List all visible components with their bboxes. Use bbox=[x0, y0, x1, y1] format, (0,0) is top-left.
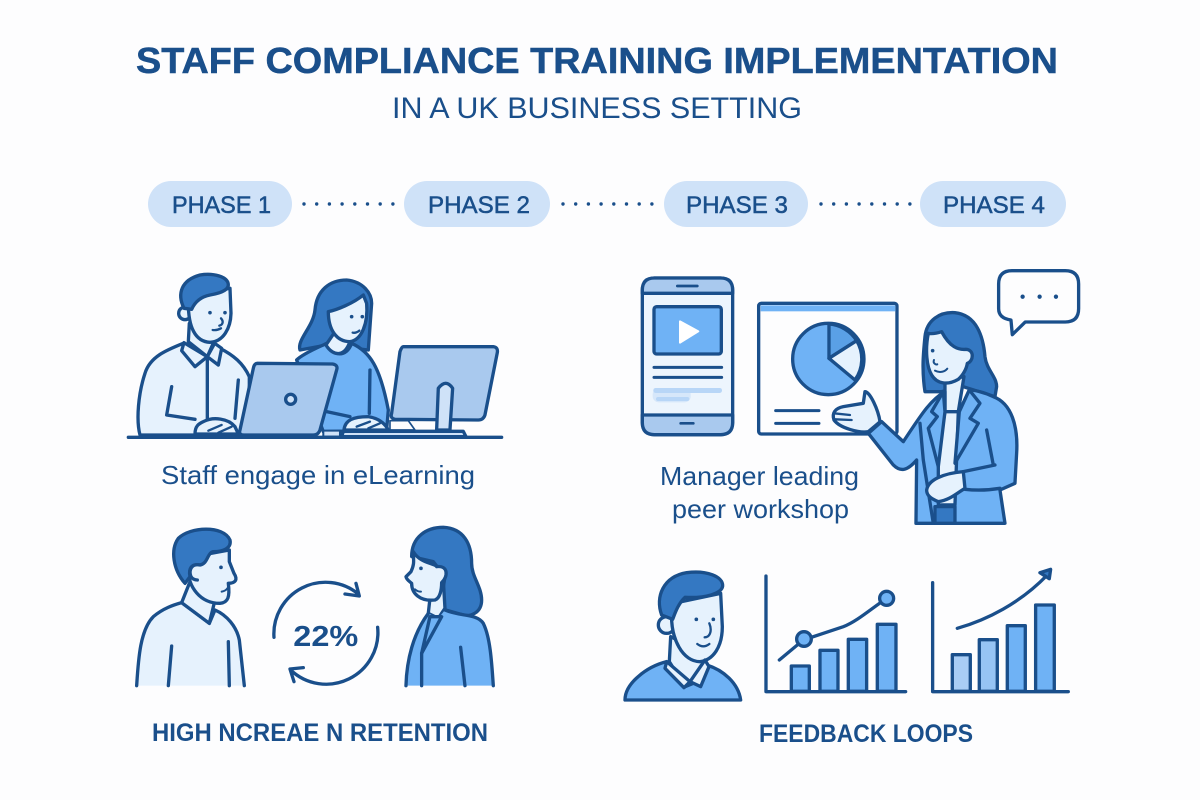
bar chart with rising arrow bbox=[933, 569, 1068, 692]
illustration: retention increase bbox=[137, 527, 493, 686]
connector dots 1 bbox=[304, 202, 393, 206]
caption: eLearning: Staff engage in eLearning bbox=[161, 460, 475, 490]
desktop monitor bbox=[323, 347, 497, 437]
connector dots 3 bbox=[821, 202, 910, 206]
phase 4 pill bbox=[920, 181, 1066, 227]
phase 4 pill: PHASE 4 bbox=[943, 192, 1045, 219]
title: STAFF COMPLIANCE TRAINING IMPLEMENTATION bbox=[136, 40, 1058, 81]
phase 1 pill: PHASE 1 bbox=[172, 192, 271, 219]
subtitle: IN A UK BUSINESS SETTING bbox=[392, 92, 802, 125]
presenter woman bbox=[833, 313, 1017, 523]
laptop bbox=[240, 363, 337, 435]
illustration: staff on laptop and desktop bbox=[128, 274, 502, 437]
phase 1 pill bbox=[148, 181, 292, 227]
line and bar chart bbox=[766, 576, 906, 692]
phone with video bbox=[642, 278, 733, 435]
desk line bbox=[128, 432, 502, 442]
presentation board with pie chart bbox=[759, 303, 897, 434]
phase 2 pill bbox=[404, 181, 550, 227]
caption: manager workshop: peer workshop bbox=[672, 494, 849, 524]
circular arrows with 22% bbox=[274, 582, 378, 684]
woman at desk bbox=[297, 280, 388, 432]
man profile bbox=[137, 529, 244, 686]
connector dots 2 bbox=[563, 202, 652, 206]
woman profile bbox=[406, 527, 493, 686]
caption: manager workshop bbox=[660, 461, 859, 524]
caption: manager workshop: Manager leading bbox=[660, 461, 859, 491]
phase 3 pill bbox=[664, 181, 808, 227]
illustration: manager presenting bbox=[642, 271, 1079, 523]
caption: feedback loops: FEEDBACK LOOPS bbox=[759, 720, 973, 748]
phase 3 pill: PHASE 3 bbox=[686, 192, 788, 219]
man portrait bbox=[625, 572, 741, 700]
phase 2 pill: PHASE 2 bbox=[428, 192, 530, 219]
man at laptop bbox=[138, 274, 249, 435]
illustration: feedback loops bbox=[625, 569, 1068, 700]
circular arrows with 22%: 22% bbox=[293, 621, 358, 653]
phase timeline bbox=[148, 181, 1066, 227]
speech bubble bbox=[999, 271, 1079, 335]
caption: retention: HIGH NCREAE N RETENTION bbox=[152, 719, 488, 747]
